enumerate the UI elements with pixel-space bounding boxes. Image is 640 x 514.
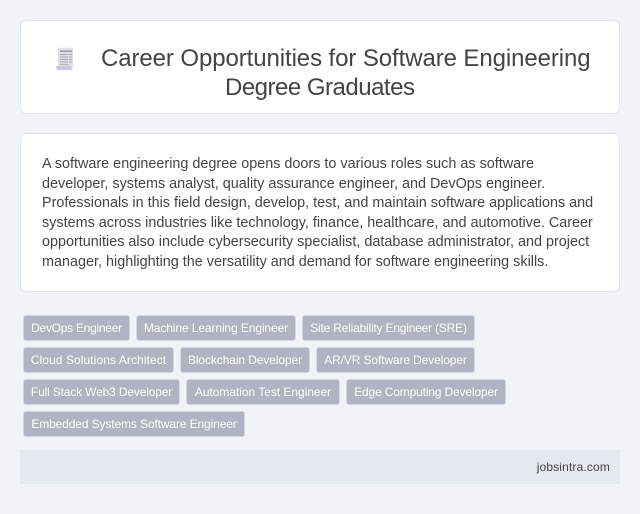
text block: description: developer, systems analyst, quality assurance engineer, and DevOps engineer. xyxy=(42,176,545,192)
footer bar xyxy=(20,450,620,484)
tag: Embedded Systems Software Engineer: Embedded Systems Software Engineer xyxy=(31,417,237,431)
title: Degree Graduates xyxy=(225,74,414,101)
tag: Machine Learning Engineer xyxy=(136,315,296,341)
text block: description: A software engineering degree opens doors to various roles such as software xyxy=(42,156,534,172)
text block: description: systems across industries like technology, finance, healthcare, and automotive. Career xyxy=(42,214,593,230)
tag: Blockchain Developer: Blockchain Developer xyxy=(188,353,302,367)
tag: Automation Test Engineer: Automation Test Engineer xyxy=(195,385,331,399)
text block: description xyxy=(42,156,593,270)
tag: DevOps Engineer xyxy=(23,315,130,341)
icon: document scroll xyxy=(56,48,73,70)
tag: Edge Computing Developer xyxy=(346,379,506,405)
title: Career Opportunities for Software Engineering xyxy=(101,45,591,72)
tag: Cloud Solutions Architect: Cloud Solutions Architect xyxy=(31,353,166,367)
tag: AR/VR Software Developer: AR/VR Software Developer xyxy=(324,353,467,367)
tag: Edge Computing Developer: Edge Computing Developer xyxy=(354,385,498,399)
title xyxy=(101,45,591,101)
tag: Blockchain Developer xyxy=(180,347,310,373)
tag list xyxy=(23,315,506,437)
tag: Cloud Solutions Architect xyxy=(23,347,174,373)
tag: AR/VR Software Developer xyxy=(316,347,475,373)
tag: Automation Test Engineer xyxy=(186,379,340,405)
footer text: site name: jobsintra.com xyxy=(537,460,610,474)
tag: DevOps Engineer: DevOps Engineer xyxy=(31,321,122,335)
panel: header card xyxy=(20,20,620,114)
panel: description card xyxy=(20,133,620,292)
text block: description: opportunities also include cybersecurity specialist, database administrator, and project xyxy=(42,234,589,250)
text block: description: Professionals in this field design, develop, test, and maintain software applications and xyxy=(42,195,593,211)
tag: Embedded Systems Software Engineer xyxy=(23,411,245,437)
tag: Full Stack Web3 Developer xyxy=(23,379,180,405)
tag: Site Reliability Engineer xyxy=(302,315,475,341)
tag: Site Reliability Engineer: Site Reliability Engineer (SRE) xyxy=(310,321,467,335)
tag: Full Stack Web3 Developer: Full Stack Web3 Developer xyxy=(31,385,172,399)
text block: description: manager, highlighting the versatility and demand for software engineering skills. xyxy=(42,254,548,270)
tag: Machine Learning Engineer: Machine Learning Engineer xyxy=(144,321,288,335)
